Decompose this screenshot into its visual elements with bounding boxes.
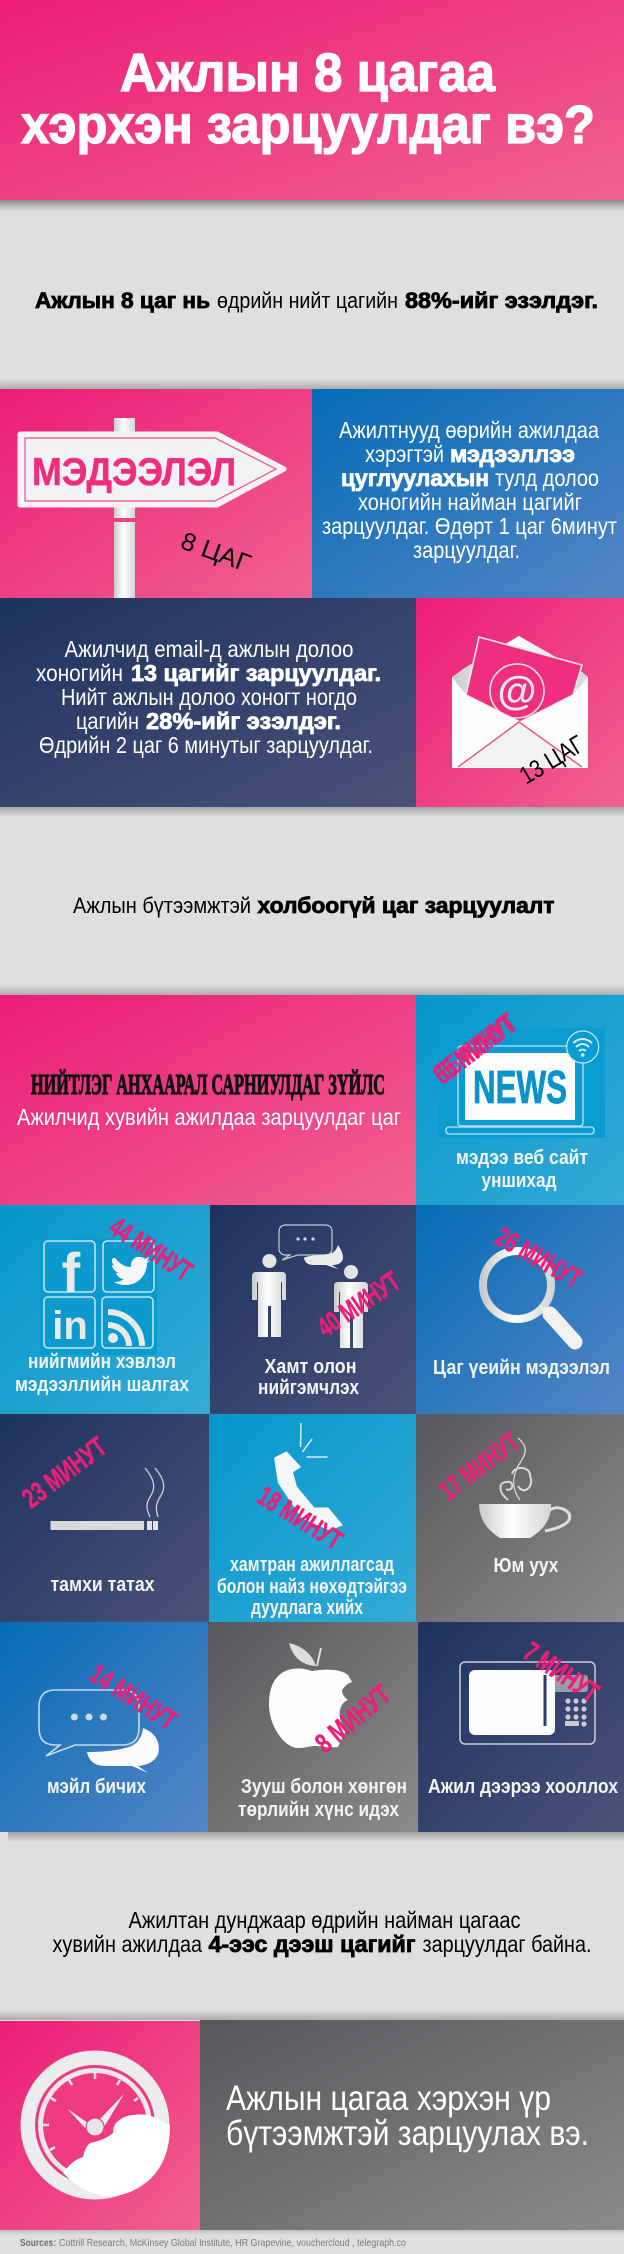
panel: common distractions heading [0, 995, 416, 1205]
panel: social media [0, 1205, 210, 1414]
icon: steaming cup [479, 1438, 570, 1538]
label: 18 minutes: 18 МИНУТ [252, 1480, 348, 1556]
panel: email text: Ажилчид email-д ажлын долоо [64, 636, 354, 662]
panel: information text: хоногийн найман цагийг [358, 489, 582, 515]
icon: news laptop: NEWS [473, 1061, 567, 1113]
panel: smoking [0, 1414, 209, 1622]
caption: дуудлага хийх [251, 1597, 363, 1619]
title banner [0, 0, 624, 200]
statement: unproductive time: холбоогүй цаг зарцуулалт [258, 893, 555, 918]
panel: information text: цуглуулахын [341, 465, 489, 491]
intro statement: Ажлын 8 цаг нь [35, 288, 210, 313]
icon: chat bubbles [39, 1690, 159, 1773]
panel: current news [416, 1205, 624, 1414]
icon: microwave [460, 1662, 595, 1744]
intro statement: өдрийн нийт цагийн [217, 288, 398, 313]
panel: information text: хэрэгтэй [365, 441, 444, 467]
caption: Зууш болон хөнгөн [241, 1776, 407, 1798]
panel: common distractions heading: НИЙТЛЭГ АНХААРАЛ САРНИУЛДАГ ЗҮЙЛС [31, 1070, 385, 1101]
panel: information text: мэдээллээ [450, 441, 575, 467]
panel: email text: Нийт ажлын долоо хоногт ногдо [61, 684, 357, 710]
panel: clock icon [0, 2021, 200, 2230]
icon: clock with cloud [20, 2050, 170, 2200]
panel: email icon [416, 598, 624, 807]
title: Ажлын 8 цагаа [120, 43, 496, 103]
panel: information text [312, 389, 624, 598]
panel: information text: зарцуулдаг. [413, 537, 520, 563]
caption: Юм уух [494, 1555, 558, 1577]
statement: unproductive time: Ажлын бүтээмжтэй [73, 893, 251, 918]
summary statement: Ажилтан дунджаар өдрийн найман цагаас [128, 1907, 520, 1933]
label: 8 minutes: 8 МИНУТ [309, 1679, 397, 1759]
caption: мэйл бичих [47, 1776, 146, 1798]
summary statement: 4-ээс дээш цагийг [208, 1931, 416, 1957]
summary statement [52, 1907, 592, 1957]
caption [15, 1351, 189, 1396]
panel: closing question: Ажлын цагаа хэрхэн үр [226, 2079, 551, 2118]
title: хэрхэн зарцуулдаг вэ? [21, 95, 595, 155]
panel: common distractions heading: Ажилчид хувийн ажилдаа зарцуулдаг цаг [17, 1104, 401, 1130]
panel: information text: тулд долоо [495, 465, 599, 491]
icon: envelope [452, 636, 588, 768]
label: 65 minutes: 65 МИНУТ [427, 1009, 521, 1090]
label: 26 minutes: 26 МИНУТ [490, 1221, 587, 1295]
sources: Cottrill Research, McKinsey Global Institute, HR Grapevine, vouchercloud , telegraph.co [59, 2237, 406, 2249]
panel: email text: хоногийн [36, 660, 123, 686]
caption: болон найз нөхөдтэйгээ [217, 1576, 407, 1598]
label: 65 minutes [427, 1007, 523, 1090]
icon: bitten apple [269, 1643, 352, 1748]
panel: news sites [416, 995, 624, 1205]
label: 40 minutes: 40 МИНУТ [311, 1265, 406, 1343]
panel: email text: Өдрийн 2 цаг 6 минутыг зарцуулдаг. [39, 732, 373, 758]
caption [217, 1554, 407, 1619]
summary statement: хувийн ажилдаа [52, 1931, 202, 1957]
title [21, 43, 595, 155]
icon: social media tiles: in [52, 1304, 88, 1348]
panel: email text [0, 598, 416, 807]
icon: signpost [20, 418, 284, 598]
label: 13 hours: 13 ЦАГ [515, 730, 589, 790]
caption: мэдээллийн шалгах [15, 1374, 189, 1396]
panel: email text: 28%-ийг эзэлдэг. [146, 708, 341, 734]
icon: magnifying glass [483, 1251, 575, 1342]
panel: colleagues [210, 1205, 416, 1414]
icon: cigarette [50, 1468, 164, 1530]
caption: хамтран ажиллагсад [230, 1554, 394, 1576]
caption: төрлийн хүнс идэх [238, 1799, 399, 1821]
panel: snacks [208, 1622, 418, 1832]
icon: telephone [275, 1423, 342, 1530]
caption: мэдээ веб сайт [456, 1147, 588, 1169]
caption: Хамт олон [264, 1356, 356, 1378]
label: 65 minutes: 65 МИНУТ [432, 1007, 523, 1086]
panel: closing question [200, 2020, 624, 2230]
caption: тамхи татах [50, 1574, 154, 1596]
summary statement: зарцуулдаг байна. [422, 1931, 592, 1957]
statement: unproductive time [73, 893, 555, 918]
caption [258, 1356, 359, 1399]
panel: email text: 13 цагийг зарцуулдаг. [131, 660, 381, 686]
caption: нийгэмчлэх [258, 1377, 359, 1399]
label: 14 minutes: 14 МИНУТ [84, 1658, 182, 1736]
panel: phone calls [209, 1414, 416, 1622]
panel: email text: цагийн [76, 708, 139, 734]
panel: eating at work [418, 1622, 624, 1832]
caption [238, 1776, 407, 1821]
icon: social media tiles: f [62, 1241, 81, 1304]
icon: news laptop [438, 1028, 605, 1138]
panel: information sign [0, 389, 312, 598]
caption: нийгмийн хэвлэл [28, 1351, 176, 1373]
label: 44 minutes: 44 МИНУТ [104, 1211, 198, 1287]
icon: social media tiles [40, 1238, 157, 1355]
caption [456, 1147, 588, 1192]
icon: envelope: @ [497, 669, 537, 713]
icon: two people talking [252, 1225, 368, 1348]
sources: Sources: [20, 2237, 56, 2249]
caption: уншихад [482, 1170, 557, 1192]
icon: signpost: МЭДЭЭЛЭЛ [32, 451, 236, 494]
label: 17 minutes: 17 МИНУТ [433, 1426, 525, 1506]
panel: tea [416, 1414, 624, 1622]
intro statement [35, 288, 598, 313]
label: 23 minutes: 23 МИНУТ [16, 1431, 112, 1514]
label: 8 hours: 8 ЦАГ [177, 527, 255, 578]
intro statement: 88%-ийг эзэлдэг. [405, 288, 598, 313]
panel: email writing [0, 1622, 208, 1832]
